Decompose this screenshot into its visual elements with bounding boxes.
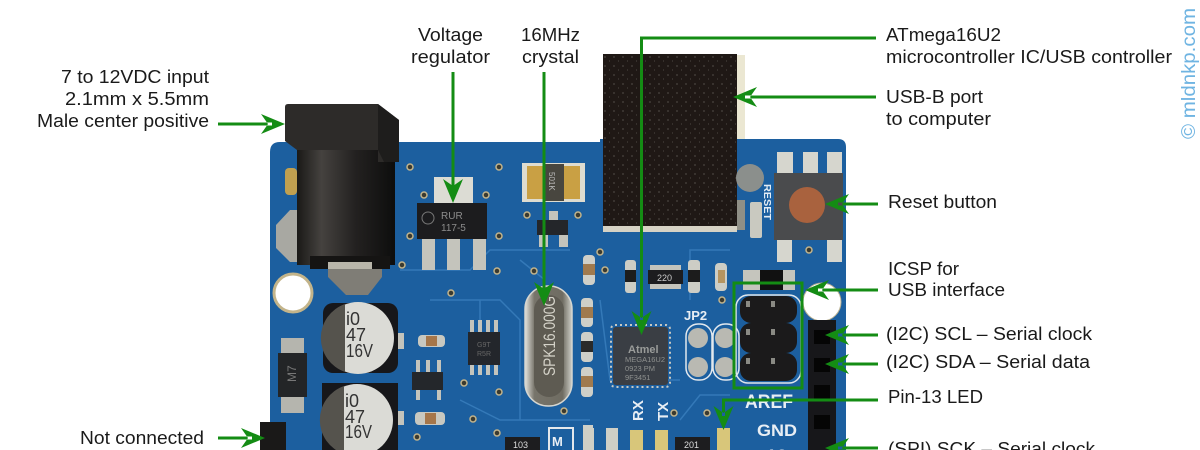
ICSP header xyxy=(736,270,801,383)
jack bottom nub xyxy=(328,262,382,295)
label: DC input: 2.1mm x 5.5mm xyxy=(65,89,209,109)
solder pads by jack xyxy=(276,210,300,262)
pins xyxy=(611,325,670,387)
top jumper xyxy=(760,270,783,290)
marking 16V: 16V xyxy=(345,422,372,442)
mounting hole left xyxy=(274,274,312,312)
8-pin IC: G9T xyxy=(477,342,491,349)
label: ICSP xyxy=(888,259,1005,300)
USB shield pad xyxy=(736,164,764,192)
body xyxy=(613,327,668,385)
label: voltage regulator xyxy=(411,25,490,67)
arrow: DC jack xyxy=(218,114,285,134)
pins xyxy=(746,301,775,364)
column resistors xyxy=(581,255,595,450)
label: crystal: 16MHz xyxy=(521,25,580,45)
body xyxy=(537,220,568,235)
crystal xyxy=(525,286,572,406)
marking: i0 xyxy=(345,391,359,411)
201 resistor network xyxy=(675,437,710,450)
on semi logo xyxy=(422,212,434,224)
label: voltage regulator: regulator xyxy=(411,47,490,67)
label: DC input xyxy=(37,67,209,131)
arrow: SDA xyxy=(825,354,878,374)
small SMD parts xyxy=(412,335,445,425)
capacitor 2 xyxy=(320,383,398,450)
regulator marking: RUR xyxy=(441,211,463,222)
jack solder highlight xyxy=(328,262,372,269)
103 resistor network xyxy=(505,437,540,450)
103 resistor network: 103 xyxy=(513,440,528,450)
base xyxy=(322,383,398,450)
arrow: pin 13 LED xyxy=(714,398,878,430)
arrow: reset xyxy=(825,194,878,214)
jack top side xyxy=(378,104,399,162)
white base xyxy=(522,163,585,202)
sockets xyxy=(814,330,830,429)
jack top block xyxy=(285,104,399,162)
dark band xyxy=(320,386,344,450)
voltage regulator xyxy=(417,177,487,270)
mounting hole right xyxy=(803,283,841,321)
8-pin IC xyxy=(468,320,500,375)
label: pin 13: Pin-13 LED xyxy=(888,387,983,407)
logo: Atmel xyxy=(628,344,659,356)
arrow: ICSP xyxy=(805,280,878,300)
label: ICSP: USB interface xyxy=(888,280,1005,300)
outline xyxy=(736,295,801,383)
body xyxy=(774,173,843,240)
marking: 501K xyxy=(547,172,556,191)
label: USB-B xyxy=(886,87,991,129)
reset switch xyxy=(774,152,843,262)
SOT transistor xyxy=(537,211,568,247)
row 1 xyxy=(740,296,797,323)
silkscreen GND: GND xyxy=(757,421,797,440)
label: voltage regulator: Voltage xyxy=(418,25,483,45)
arrows xyxy=(218,36,878,450)
arrow: SCL xyxy=(825,325,878,345)
center xyxy=(543,164,564,201)
220 resistor network: 220 xyxy=(657,273,672,283)
diode M7 xyxy=(278,338,307,413)
pads xyxy=(777,152,842,262)
220 resistor network xyxy=(648,265,683,289)
pads xyxy=(281,338,304,413)
regulator tab xyxy=(434,177,473,204)
201 resistor network: 201 xyxy=(684,440,699,450)
line 2: 0923 PM xyxy=(625,364,655,373)
label: ICSP: ICSP for xyxy=(888,259,959,279)
arrow: not connected xyxy=(218,428,265,448)
tan pads xyxy=(527,166,580,199)
label: DC input: 7 to 12VDC input xyxy=(61,67,209,87)
arrow: USB-B xyxy=(733,87,876,107)
can xyxy=(525,286,572,406)
arrow: SPI SCK xyxy=(825,438,878,450)
white silkscreen box xyxy=(549,428,573,450)
label: ATmega16U2: ATmega16U2 xyxy=(886,25,1001,45)
marking 47: 47 xyxy=(346,325,366,345)
label: USB-B: USB-B port xyxy=(886,87,983,107)
row 2 xyxy=(740,323,797,353)
jack body xyxy=(297,140,395,265)
arrow: ATmega xyxy=(632,36,876,335)
label: SDA: (I2C) SDA – Serial data xyxy=(886,352,1091,372)
label: ATmega16U2: microcontroller IC/USB controller xyxy=(886,47,1172,67)
Arduino board photo xyxy=(260,54,846,450)
outline 2 xyxy=(713,324,739,380)
pads xyxy=(688,328,735,377)
USB-B bottom rim xyxy=(603,226,737,232)
watermark: © mldnkp.com xyxy=(1179,8,1200,139)
marking: M7 xyxy=(285,365,299,382)
legs xyxy=(539,211,568,247)
USB-B pale edge xyxy=(737,55,745,139)
LEDs xyxy=(583,428,730,450)
upper SMD parts xyxy=(625,260,727,293)
capacitor pads xyxy=(398,333,404,425)
regulator marking 2: 117-5 xyxy=(441,223,466,234)
jack base shadow xyxy=(310,256,390,269)
marking 47: 47 xyxy=(345,407,365,427)
outline xyxy=(686,324,712,380)
marking: i0 xyxy=(346,309,360,329)
line 3: 9F3451 xyxy=(625,373,650,382)
vias xyxy=(399,164,812,440)
reset silkscreen: RESET xyxy=(761,184,772,220)
label: DC input: Male center positive xyxy=(37,111,209,131)
label: JP2 xyxy=(684,308,707,323)
silkscreen TX: TX xyxy=(655,402,672,421)
blue PCB xyxy=(270,139,846,450)
label: crystal: crystal xyxy=(522,47,579,67)
arrow: voltage regulator xyxy=(443,72,463,203)
label: USB-B: to computer xyxy=(886,109,991,129)
arrow: crystal xyxy=(534,72,554,306)
label: reset: Reset button xyxy=(888,192,997,212)
line 1: MEGA16U2 xyxy=(625,355,665,364)
can xyxy=(321,384,393,450)
label: crystal xyxy=(521,25,580,67)
marking: SPK16.000G xyxy=(540,296,559,376)
button xyxy=(789,187,825,223)
tan pad by jack xyxy=(285,168,297,195)
USB-B port xyxy=(603,54,737,230)
501K SMD component xyxy=(522,163,585,202)
JP2 footprint xyxy=(684,308,739,380)
label: SCL: (I2C) SCL – Serial clock xyxy=(886,324,1093,344)
PCB traces xyxy=(400,250,730,420)
right pin header xyxy=(808,320,836,450)
bottom-left connector xyxy=(260,422,286,450)
base xyxy=(323,303,398,373)
marking 16V: 16V xyxy=(346,341,373,361)
ICSP highlight box xyxy=(734,283,802,388)
row 3 xyxy=(740,353,797,381)
regulator legs xyxy=(422,238,486,270)
label: ATmega16U2 xyxy=(886,25,1172,67)
silkscreen AREF: AREF xyxy=(745,392,793,413)
resistor near USB xyxy=(750,202,762,238)
body xyxy=(808,320,836,450)
body xyxy=(278,353,307,397)
regulator body xyxy=(417,203,487,239)
silkscreen RX: RX xyxy=(630,400,647,421)
USB side pad xyxy=(737,200,745,230)
label: not connected: Not connected xyxy=(80,428,204,448)
inner xyxy=(534,295,564,397)
top jumper pads xyxy=(743,270,795,290)
8-pin IC: R5R xyxy=(477,351,491,358)
ATmega16U2 chip xyxy=(611,325,670,387)
can xyxy=(322,302,394,374)
white silkscreen box: M xyxy=(552,434,563,449)
dark band xyxy=(321,304,345,372)
capacitor 1 xyxy=(321,302,398,374)
